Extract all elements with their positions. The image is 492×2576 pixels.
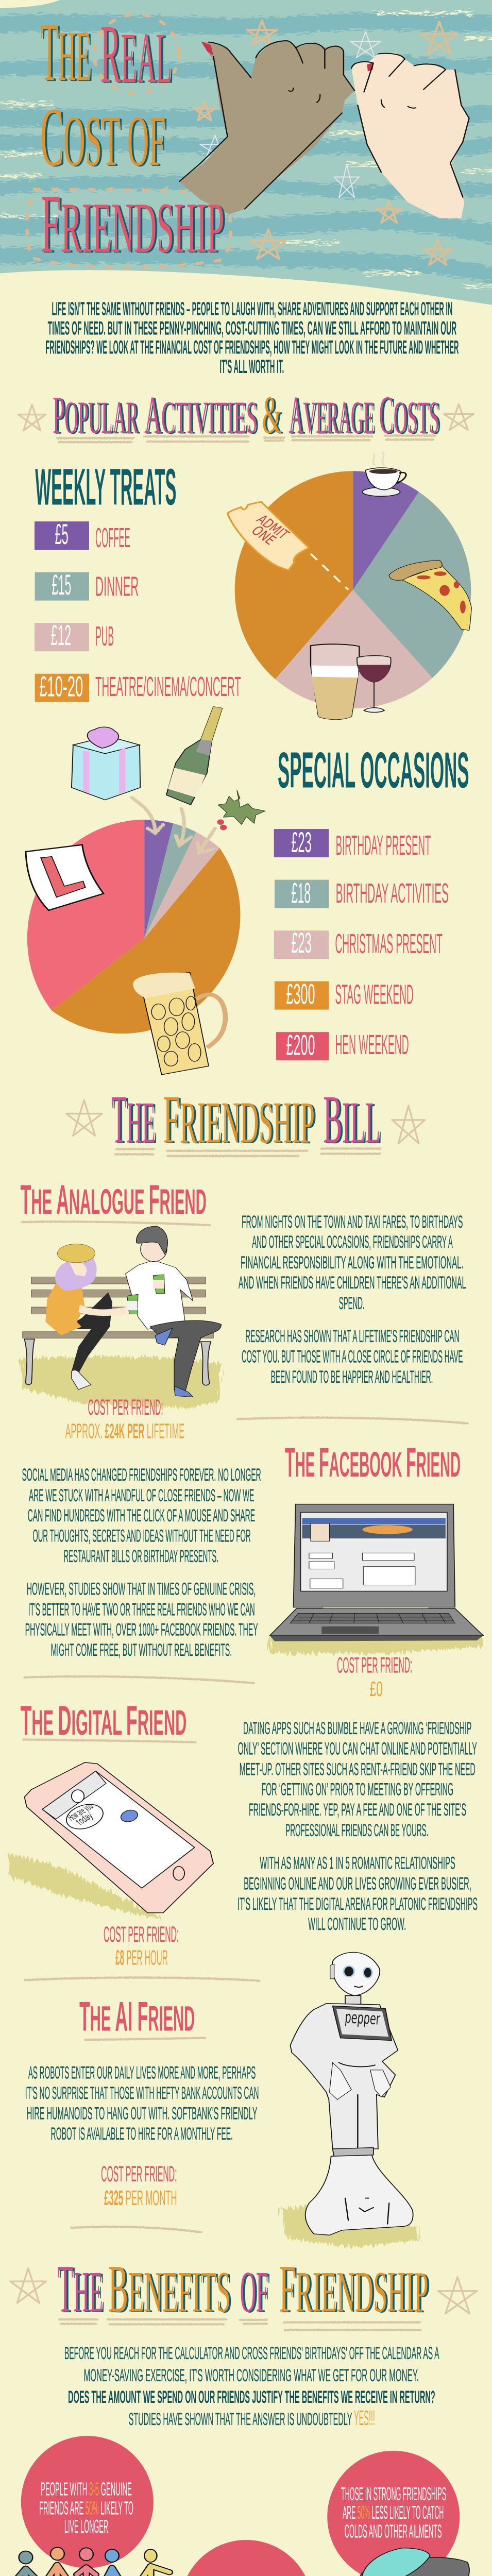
heading: the digital friend: THE DIGITAL FRIEND xyxy=(21,1698,186,1743)
arrows to pie slices xyxy=(132,798,215,853)
cost per friend: analogue xyxy=(65,1395,184,1443)
white stars xyxy=(200,31,381,197)
cost per friend: digital xyxy=(104,1922,179,1969)
callout: live longer: LIVE LONGER xyxy=(64,2516,108,2537)
icon: pizza slice xyxy=(389,560,471,631)
text: ai friend description xyxy=(25,2063,259,2144)
legend: dinner: £15 xyxy=(52,569,71,601)
illustration: pepper robot xyxy=(279,1952,420,2247)
title: COST OF xyxy=(40,91,166,183)
pie chart: weekly treats xyxy=(235,471,471,708)
legend: pub: £12 xyxy=(51,619,71,651)
legend: birthday present xyxy=(274,826,431,860)
cost per friend: ai xyxy=(101,2162,177,2210)
icon: pint and wine glass xyxy=(311,644,391,719)
icon: admit one ticket: ONE xyxy=(248,523,279,548)
illustration: pepper robot: pepper xyxy=(344,2007,381,2029)
gold stars xyxy=(194,21,458,265)
legend: theatre, cinema, concert: £10-20 xyxy=(39,671,83,703)
cost per friend: facebook xyxy=(337,1653,412,1701)
legend: hen weekend xyxy=(276,1029,409,1061)
legend: coffee xyxy=(35,518,130,553)
text: benefits introduction xyxy=(64,2343,439,2430)
section: analogue and facebook friends: COST PER FRIEND: xyxy=(88,1395,163,1420)
legend: hen weekend: £200 xyxy=(286,1029,315,1061)
section: ai friend: COST PER FRIEND: xyxy=(104,1922,179,1947)
section: benefits xyxy=(14,2343,485,2576)
heading: the benefits of friendship: BENEFITS xyxy=(108,2251,231,2326)
icon: holly xyxy=(217,790,265,830)
icon: learner L plate xyxy=(26,845,104,910)
icon: sick person with ice pack xyxy=(347,2548,485,2576)
legend: coffee: £5 xyxy=(55,518,69,550)
cost per friend: facebook: £0 xyxy=(369,1677,383,1701)
section: popular activities and weekly treats: DINNER xyxy=(95,571,139,602)
heading: the digital friend xyxy=(21,1698,195,1743)
heading: popular activities and average costs xyxy=(18,385,473,445)
legend: birthday activities xyxy=(275,877,449,909)
icon: champagne bottle xyxy=(166,707,222,805)
heading: popular activities and average costs: ACTIVITIES xyxy=(144,385,257,445)
illustration: friends on a bench xyxy=(21,1226,221,1408)
legend: christmas present: £23 xyxy=(291,927,312,959)
text: facebook friend description, first paragraph xyxy=(22,1465,261,1546)
legend: christmas present xyxy=(274,927,443,959)
heading: the friendship bill: THE xyxy=(111,1081,155,1158)
section: facebook and digital friends xyxy=(8,1504,483,1934)
text: analogue friend description xyxy=(239,1212,466,1387)
pie chart: special occasions xyxy=(27,820,241,1033)
legend: birthday activities: £18 xyxy=(291,877,311,909)
section: popular activities and weekly treats: PUB xyxy=(95,620,114,652)
illustration: laptop xyxy=(268,1504,483,1654)
section: ai friend: COST PER FRIEND: xyxy=(101,2162,177,2187)
illustration: smartphone: How are you xyxy=(65,1801,95,1823)
section: ai friend: £325 PER MONTH xyxy=(104,2186,177,2210)
icon: gift box xyxy=(72,727,140,800)
heading: the ai friend xyxy=(79,1994,205,2040)
icon: group of five friends xyxy=(14,2547,169,2576)
illustration: smartphone: today xyxy=(74,1810,95,1827)
heading: the friendship bill xyxy=(66,1081,425,1158)
title: THE xyxy=(41,6,91,98)
callout: social circle happiness xyxy=(180,2540,313,2576)
intro text xyxy=(45,298,459,377)
section: special occasions xyxy=(26,707,469,1158)
heading: the friendship bill: BILL xyxy=(323,1081,380,1158)
icon: admit one ticket: ADMIT xyxy=(253,512,293,542)
section: popular activities and weekly treats: COFFEE xyxy=(95,522,130,553)
title: REAL xyxy=(100,8,172,100)
heading: popular activities and average costs: POPULAR xyxy=(53,385,138,445)
icon: coffee cup xyxy=(362,452,406,496)
text: analogue friend description: SPEND. xyxy=(339,1293,365,1313)
heading: popular activities and average costs: & xyxy=(262,385,281,445)
header panel xyxy=(0,0,492,377)
text: digital friend description xyxy=(237,1718,478,1934)
section: popular activities and weekly treats xyxy=(18,385,473,719)
heading: the benefits of friendship: THE xyxy=(57,2251,103,2326)
sparkle dashes around the title xyxy=(27,14,231,268)
section: analogue and facebook friends xyxy=(21,1177,467,1546)
heading: the benefits of friendship xyxy=(10,2251,477,2330)
intro text: IT'S ALL WORTH IT. xyxy=(219,355,284,377)
section: ai friend: £8 PER HOUR xyxy=(115,1946,168,1969)
icon: beer stein xyxy=(133,972,225,1075)
title xyxy=(40,6,224,270)
section: ai friend xyxy=(10,1922,477,2330)
illustration: smartphone xyxy=(8,1762,213,1920)
callout: live longer: PEOPLE WITH 3-5 GENUINE xyxy=(41,2478,132,2499)
legend: dinner xyxy=(35,569,139,602)
icon: linked pinky hands xyxy=(179,41,469,218)
callout: live longer xyxy=(21,2436,154,2568)
icon: admit one ticket xyxy=(228,502,309,570)
callout: live longer: FRIENDS ARE 50% LIKELY TO xyxy=(39,2497,133,2518)
legend: stag weekend xyxy=(275,978,414,1010)
text: facebook friend description, second part xyxy=(25,1546,258,1660)
callout: fewer colds xyxy=(327,2451,460,2576)
legend: birthday present: £23 xyxy=(291,826,312,858)
legend: stag weekend: £300 xyxy=(286,978,315,1010)
heading: the ai friend: THE AI FRIEND xyxy=(79,1994,195,2040)
heading: the benefits of friendship: OF xyxy=(240,2260,268,2325)
watercolour band xyxy=(0,0,492,315)
text: benefits introduction: YES!!! xyxy=(354,2406,375,2430)
legend: theatre, cinema, concert xyxy=(35,671,241,703)
cost per friend: analogue: APPROX. £24K PER LIFETIME xyxy=(65,1419,184,1443)
heading: the analogue friend xyxy=(21,1177,210,1225)
heading: the analogue friend: THE ANALOGUE FRIEND xyxy=(21,1177,207,1223)
